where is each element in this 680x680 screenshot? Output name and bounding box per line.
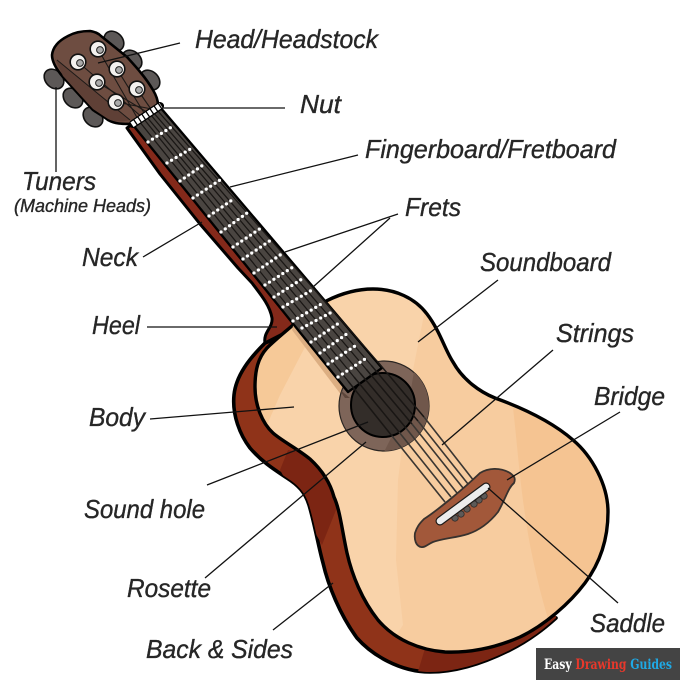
label: soundboard [418, 247, 612, 342]
label: tuners (machine heads) [14, 87, 151, 216]
label: sound hole [84, 422, 368, 524]
tuning pegs [70, 41, 145, 110]
soundboard [245, 289, 620, 660]
heel and neck side [127, 110, 300, 343]
label: saddle [488, 488, 665, 638]
label: bridge: Bridge [594, 381, 665, 411]
rosette [338, 360, 430, 452]
logo: easy drawing guides [536, 648, 680, 680]
label: frets [285, 192, 461, 287]
label: rosette: Rosette [127, 573, 211, 603]
saddle [440, 487, 486, 521]
label: soundboard: Soundboard [480, 247, 612, 277]
nut [132, 105, 161, 125]
sound hole [351, 373, 415, 437]
strings [139, 110, 474, 502]
label: strings [442, 318, 634, 445]
label: fingerboard / fretboard: Fingerboard/Fretboard [365, 134, 617, 164]
label: tuners (machine heads): Tuners [22, 166, 96, 196]
label: rosette [127, 442, 366, 603]
back and sides [234, 330, 570, 675]
label: head / headstock: Head/Headstock [195, 24, 380, 54]
bridge [415, 469, 515, 547]
headstock [52, 31, 158, 124]
label: nut: Nut [300, 89, 343, 119]
label: tuners (machine heads): (Machine Heads) [14, 196, 151, 216]
fretboard shadow [292, 322, 348, 396]
neck fretboard [133, 107, 382, 392]
label: back and sides: Back & Sides [146, 634, 293, 664]
tuner knobs [40, 27, 164, 131]
label: fingerboard / fretboard [230, 134, 617, 187]
label: bridge [507, 381, 665, 480]
label: saddle: Saddle [590, 608, 665, 638]
label: body [89, 402, 294, 432]
label: sound hole: Sound hole [84, 494, 205, 524]
head strings [78, 49, 157, 121]
label: neck [82, 222, 202, 272]
label: strings: Strings [556, 318, 634, 348]
label: neck: Neck [82, 242, 140, 272]
label: head / headstock [98, 24, 380, 63]
label: frets: Frets [405, 192, 461, 222]
frets [148, 126, 368, 377]
label: heel: Heel [92, 310, 141, 340]
bridge pins [452, 493, 487, 521]
label: back and sides [146, 583, 333, 664]
label: body: Body [89, 402, 147, 432]
